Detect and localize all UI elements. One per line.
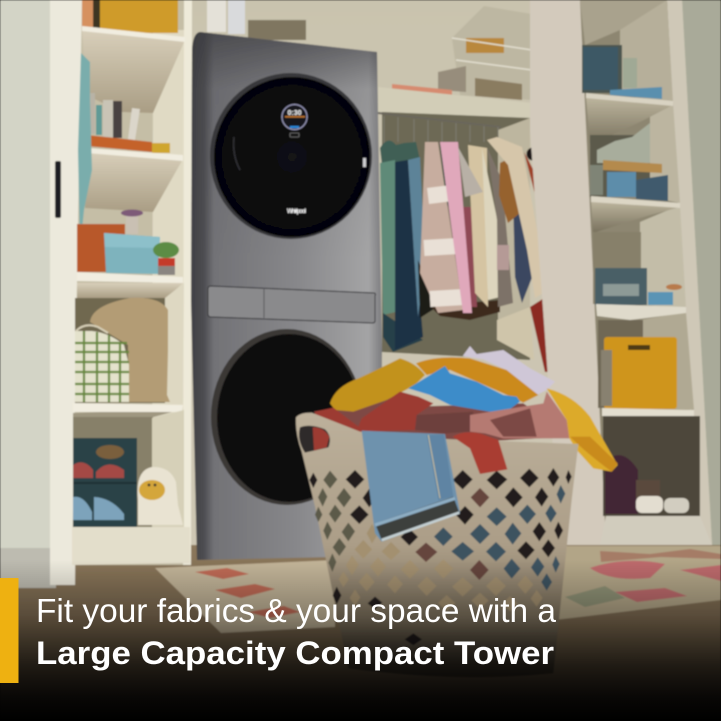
- shelf 4: [602, 408, 694, 416]
- shelf 1: [586, 93, 673, 145]
- panel: right open shelving: [580, 0, 721, 545]
- headline line 2: Large Capacity Compact Tower: [36, 635, 554, 671]
- closet shelf board: [378, 87, 532, 118]
- top shelf: [82, 26, 185, 113]
- side panels: [620, 0, 673, 102]
- rug: [155, 546, 721, 633]
- panel: hanging clothes: [378, 112, 562, 372]
- smiley plush toy: [138, 467, 183, 525]
- purple bag: [605, 455, 638, 514]
- shelf 2: [591, 196, 680, 233]
- fourth shelf: [73, 403, 183, 418]
- yellow storage box: [82, 0, 178, 33]
- basket lattice holes: beige knit: [339, 524, 543, 611]
- clothes rail: [378, 113, 501, 127]
- jar: [590, 165, 603, 195]
- bottom dark gradient overlay: [0, 560, 721, 721]
- orange box: [77, 224, 125, 272]
- file dividers: [597, 123, 650, 163]
- washer door: 0:30: [287, 110, 302, 117]
- headline line 1: Fit your fabrics & your space with a: [36, 592, 557, 629]
- cactus: [153, 242, 179, 275]
- plaid bag: [75, 325, 129, 402]
- basket lattice holes: reddish: [415, 488, 489, 580]
- clear shoe bins: [73, 438, 137, 527]
- organizer: [583, 47, 618, 90]
- panel: left open shelving: [72, 0, 192, 565]
- display: [282, 104, 307, 130]
- yellow accent bar: [0, 578, 18, 683]
- washer door: [210, 73, 372, 239]
- bottom plinth: [72, 527, 190, 565]
- pale file holders: [623, 58, 637, 88]
- mesh bin: [595, 268, 647, 305]
- washer door: Whirlpool: [287, 209, 306, 215]
- right wall: [682, 0, 721, 545]
- clear storage bins: [452, 6, 532, 100]
- wooden rack: [603, 160, 662, 173]
- shelf 3: [596, 304, 686, 320]
- second shelf: [85, 148, 183, 212]
- books: [87, 93, 170, 153]
- control drawer: [208, 286, 375, 323]
- right side panel: [152, 30, 186, 527]
- basket lattice holes: blue fabric: [434, 485, 565, 591]
- blue tray: [610, 87, 662, 99]
- third shelf: [77, 272, 183, 298]
- ceiling underside: [580, 0, 667, 45]
- panel: right cabinet column: [530, 0, 606, 545]
- icon: red sleeve: [453, 432, 507, 474]
- icon: denim jeans cuff: [362, 431, 460, 542]
- panel: left cabinet door: [0, 0, 82, 588]
- bottom plinth: [600, 516, 712, 545]
- dryer door: [211, 329, 363, 505]
- basket lattice holes: mid-dark green grey: [315, 471, 355, 572]
- mushroom lamp: [121, 210, 143, 234]
- yellow storage tub: [604, 337, 677, 409]
- interior shadow: [75, 298, 165, 403]
- basket body: [296, 413, 578, 677]
- basket lattice holes: dark: [309, 468, 572, 645]
- teal scarf: [78, 53, 92, 250]
- washer dryer tower: [191, 32, 382, 560]
- icon: clothes pile: [312, 346, 618, 472]
- blue box: [607, 172, 636, 197]
- headline text: [36, 592, 557, 671]
- lower interior: [73, 417, 153, 527]
- floor: [0, 545, 721, 721]
- small blue box: [648, 292, 673, 305]
- dark blue bag: [636, 175, 668, 201]
- hanging towel: [601, 350, 612, 406]
- shoes: [636, 480, 689, 513]
- right frame: [667, 0, 712, 545]
- tan backpack: [90, 298, 170, 402]
- laundry basket with clothes: [296, 346, 618, 677]
- panel: items above tower and closet shelf: [207, 0, 532, 118]
- blue gift box: [104, 233, 160, 274]
- icon: basket handle hole: [299, 426, 330, 453]
